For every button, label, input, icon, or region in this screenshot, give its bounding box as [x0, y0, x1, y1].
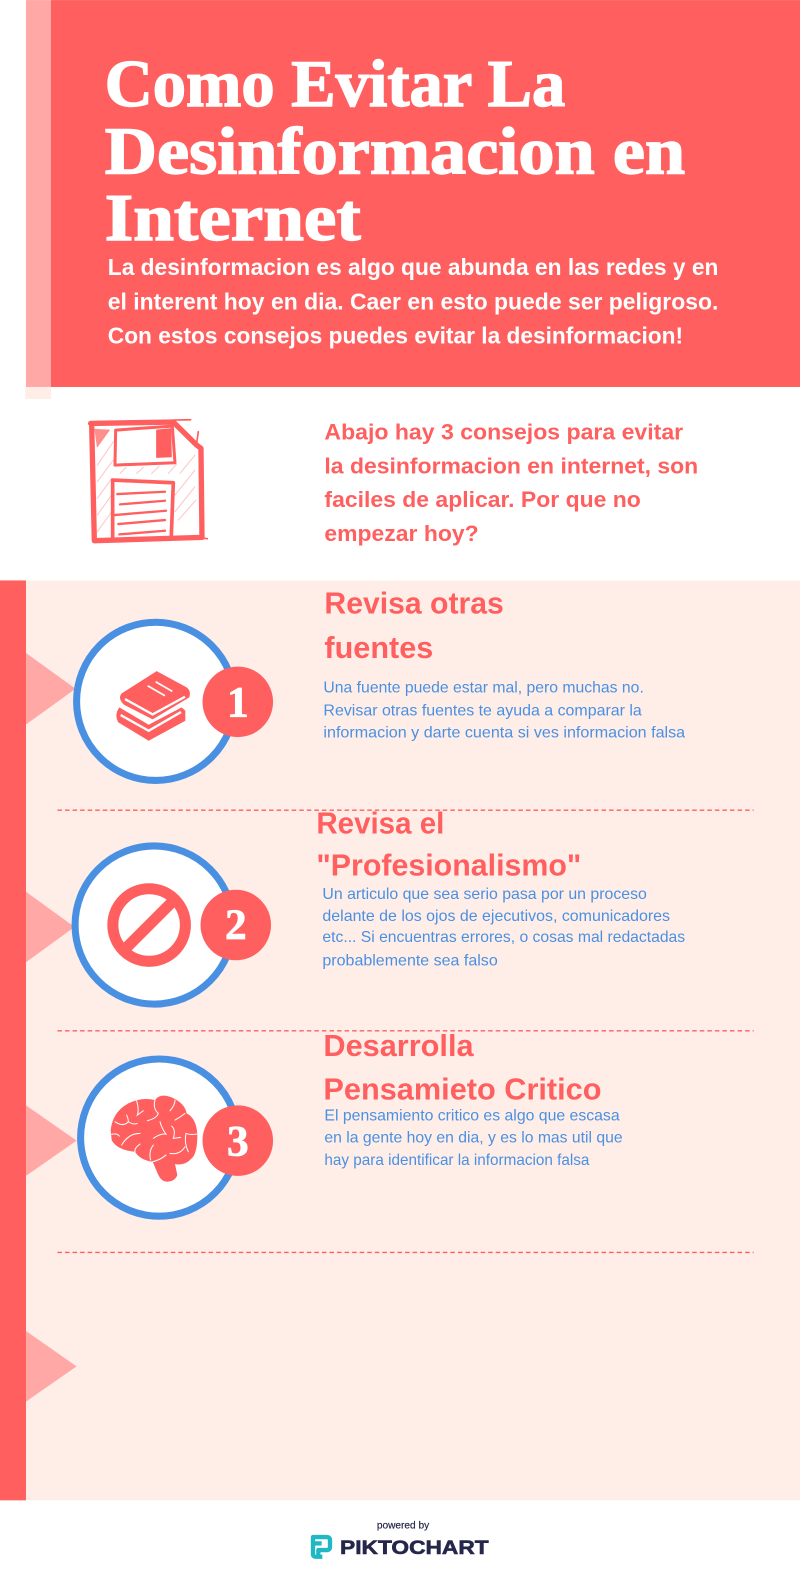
tip 2: body text: etc... Si encuentras errores, o cosas mal redactadas	[322, 929, 685, 946]
tip 3: heading	[323, 1030, 602, 1106]
badge 1	[203, 667, 273, 737]
intro text: Abajo hay 3 consejos para evitar	[324, 419, 684, 444]
tip 1: body text: Revisar otras fuentes te ayuda a comparar la	[323, 702, 642, 719]
tip 3: icon circle	[81, 1059, 273, 1216]
tip 1: heading	[324, 588, 504, 665]
tip 2: icon circle	[75, 846, 271, 1004]
tip 3: heading: Pensamieto Critico	[323, 1073, 602, 1106]
panel: header	[25, 0, 800, 399]
tip 2: body text: delante de los ojos de ejecutivos, comunicadores	[322, 908, 670, 925]
tip 3: body text	[324, 1107, 623, 1169]
subtitle text	[108, 254, 718, 349]
icon: brain	[111, 1096, 197, 1182]
badge 1: 1	[227, 678, 249, 726]
icon: hand-drawn floppy disk	[91, 420, 207, 541]
triangle marker 2	[26, 892, 75, 962]
tip 2: body text: probablemente sea falso	[322, 952, 498, 969]
tip 1: body text: Una fuente puede estar mal, pero muchas no.	[323, 679, 644, 696]
badge 2	[201, 890, 271, 960]
panel: tips background	[0, 580, 800, 1500]
tip 2: body text: Un articulo que sea serio pasa por un proceso	[322, 886, 647, 903]
badge 3: 3	[227, 1118, 249, 1166]
intro text	[324, 419, 698, 546]
intro text: la desinformacion en internet, son	[324, 454, 698, 479]
intro text: empezar hoy?	[324, 521, 479, 546]
intro text: faciles de aplicar. Por que no	[324, 487, 641, 512]
tip 2: heading	[316, 807, 581, 883]
triangle marker 4	[26, 1331, 77, 1402]
tip 3: body text: hay para identificar la informacion falsa	[324, 1152, 590, 1169]
tip 1: icon circle	[77, 622, 273, 780]
tip 2: heading: "Profesionalismo"	[316, 850, 581, 883]
badge 2: 2	[225, 901, 247, 949]
icon: piktochart logo	[313, 1537, 330, 1557]
tip 3: body text: en la gente hoy en dia, y es lo mas util que	[324, 1130, 623, 1147]
tip 2: heading: Revisa el	[316, 807, 444, 840]
title	[105, 48, 685, 255]
subtitle text: Con estos consejos puedes evitar la desinformacion!	[108, 323, 683, 349]
icon: books	[116, 671, 190, 741]
subtitle text: La desinformacion es algo que abunda en las redes y en	[108, 254, 718, 280]
tip 3: body text: El pensamiento critico es algo que escasa	[324, 1107, 620, 1124]
tip 1: body text: informacion y darte cuenta si ves informacion falsa	[323, 725, 685, 742]
footer: piktochart branding: powered by	[377, 1520, 430, 1532]
tip 1: heading: fuentes	[324, 632, 433, 665]
subtitle text: el interent hoy en dia. Caer en esto puede ser peligroso.	[108, 288, 718, 314]
badge 3	[203, 1105, 273, 1176]
tip 2: body text	[322, 886, 685, 969]
triangle marker 3	[26, 1105, 77, 1176]
title: Desinformacion en	[105, 115, 685, 188]
tip 3: heading: Desarrolla	[323, 1030, 474, 1063]
title: Como Evitar La	[105, 48, 565, 121]
tip 1: body text	[323, 679, 685, 742]
title: Internet	[105, 182, 361, 255]
triangle marker 1	[26, 653, 76, 725]
footer: piktochart branding	[313, 1520, 489, 1559]
footer: piktochart branding: PIKTOCHART	[340, 1537, 489, 1559]
tip 1: heading: Revisa otras	[324, 588, 504, 621]
icon: prohibition sign	[113, 889, 185, 961]
